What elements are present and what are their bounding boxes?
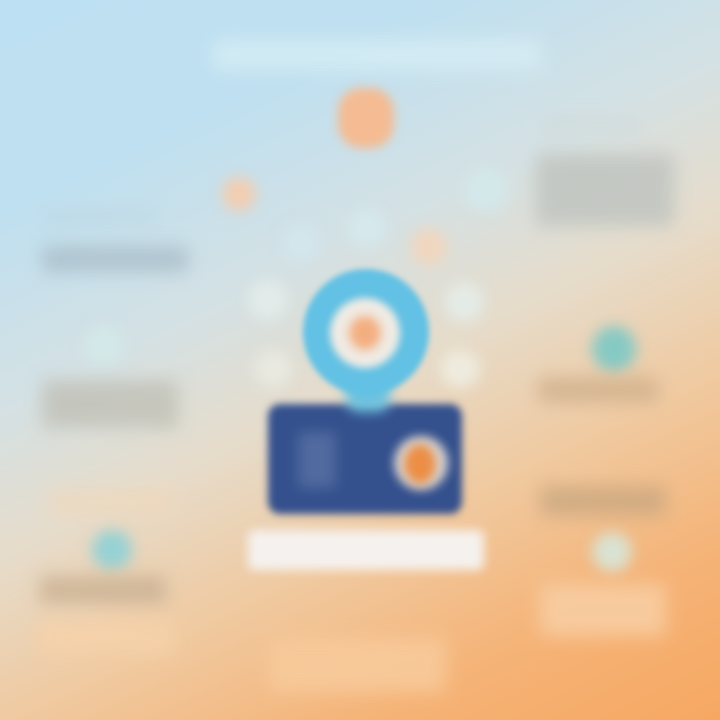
location pin target bbox=[299, 265, 433, 420]
left pale text bbox=[50, 490, 176, 514]
left pale text bottom bbox=[38, 620, 174, 654]
laptop screen lines bbox=[298, 432, 336, 488]
icon: top orange badge bbox=[338, 88, 394, 148]
icon: small orange badge bbox=[222, 177, 256, 211]
right heading bbox=[540, 118, 640, 132]
right text block 3 bbox=[540, 486, 666, 516]
right pale text bottom bbox=[540, 584, 666, 636]
laptop screen avatar bbox=[386, 428, 455, 498]
laptop base bbox=[248, 530, 484, 570]
icon: right pale badge bbox=[592, 532, 632, 572]
left text block 2 bbox=[42, 380, 178, 428]
left text block 1 bbox=[38, 240, 192, 278]
icon: left pale badge bbox=[84, 326, 124, 366]
icon: left teal badge bbox=[92, 530, 132, 570]
icon: network nodes bbox=[252, 222, 486, 392]
left text block 3 bbox=[40, 576, 166, 604]
icon: right teal badge bbox=[592, 326, 636, 372]
laptop screen bbox=[268, 404, 462, 514]
title bbox=[212, 40, 542, 70]
bottom center pale text bbox=[270, 638, 446, 692]
right text block 2 bbox=[538, 378, 658, 402]
right text block 1 bbox=[536, 154, 674, 226]
icon: pale blue badge right bbox=[464, 168, 508, 212]
